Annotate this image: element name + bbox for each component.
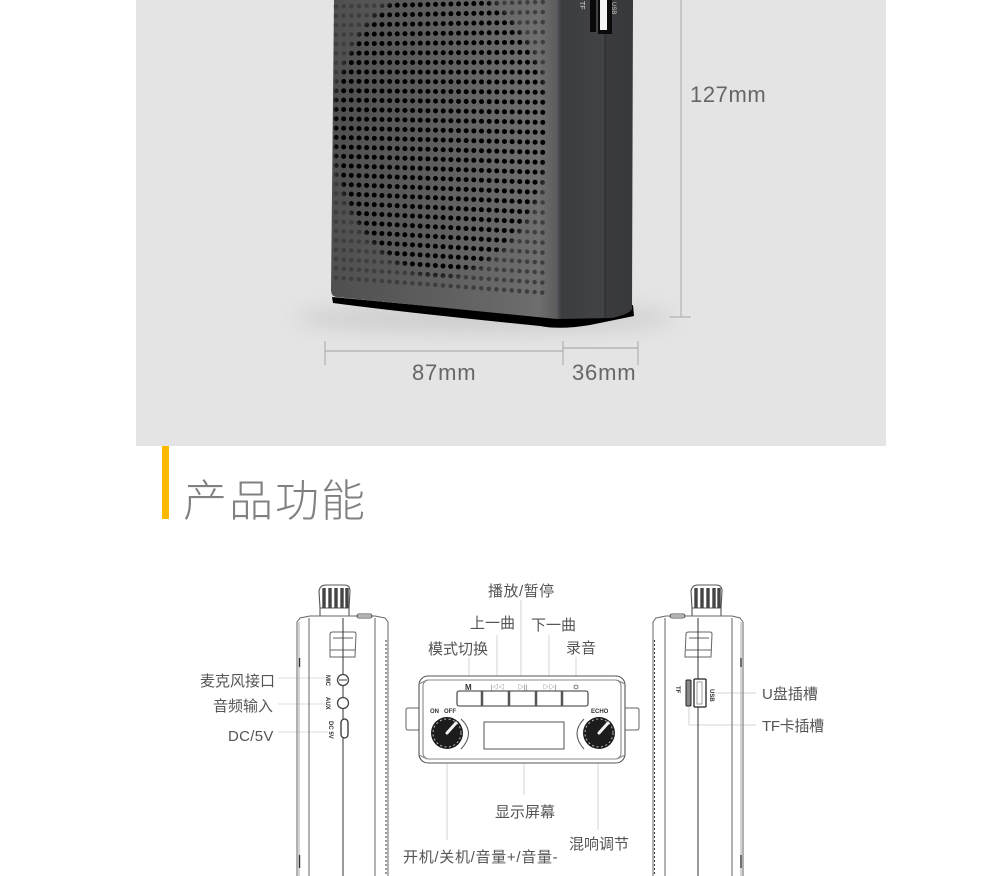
label: previous: 上一曲 <box>470 615 515 632</box>
label: display: 显示屏幕 <box>495 804 555 821</box>
screen <box>484 722 564 749</box>
DC port <box>327 719 348 739</box>
dimension: depth 36mm <box>563 341 638 385</box>
label: mode: 模式切换 <box>428 641 488 658</box>
leader lines left <box>278 678 328 732</box>
DC port: DC 5V <box>327 721 333 739</box>
left knob: OFF <box>444 709 456 715</box>
label: next: 下一曲 <box>531 617 576 634</box>
leader lines <box>447 600 598 840</box>
left knob <box>430 709 468 749</box>
label: mic: 麦克风接口 <box>200 673 275 690</box>
USB slot: USB <box>708 689 714 702</box>
left knob: ON <box>430 709 439 715</box>
label: TF slot: TF卡插槽 <box>762 718 824 735</box>
MIC port <box>324 674 348 687</box>
diagram: top view <box>403 583 639 866</box>
TF slot <box>674 680 691 706</box>
diagram: left side view <box>200 585 388 876</box>
panel: product dimensions <box>136 0 886 446</box>
side tabs <box>406 708 639 730</box>
diagram: right side view <box>653 585 824 876</box>
top knob <box>670 585 722 618</box>
AUX port <box>324 697 348 710</box>
right knob <box>577 709 615 749</box>
AUX port: AUX <box>324 697 330 710</box>
button row <box>457 683 588 706</box>
button row: |◁◁ <box>491 684 505 691</box>
dimension: width 87mm: 87mm <box>412 360 476 385</box>
ports on speaker side: USB <box>610 2 616 14</box>
label: audio in: 音频输入 <box>213 698 273 715</box>
label: power volume: 开机/关机/音量+/音量- <box>403 849 558 866</box>
dimension: height 127mm: 127mm <box>690 82 766 107</box>
top knob <box>319 585 372 618</box>
body outline <box>297 616 388 876</box>
right knob: ECHO <box>591 709 609 715</box>
button row: ▷▷| <box>543 684 557 691</box>
panel outline <box>419 676 625 763</box>
section accent bar <box>162 446 169 519</box>
MIC port: MIC <box>324 675 330 687</box>
label: echo: 混响调节 <box>569 836 629 853</box>
button row: M <box>465 683 472 692</box>
USB slot <box>694 679 714 707</box>
label: dc: DC/5V <box>228 728 274 745</box>
dimension: depth 36mm: 36mm <box>572 360 636 385</box>
speaker photo <box>331 0 634 328</box>
label: record: 录音 <box>566 640 596 657</box>
ports on speaker side: TF <box>578 1 585 10</box>
body outline <box>653 616 743 876</box>
ports on speaker side <box>578 0 616 34</box>
TF slot: TF <box>674 686 680 694</box>
button row: ▷|| <box>518 684 528 691</box>
label: play pause: 播放/暂停 <box>488 583 555 600</box>
heading: 产品功能 <box>183 477 367 526</box>
label: USB slot: U盘插槽 <box>762 685 818 703</box>
speaker floor shadow <box>295 304 675 332</box>
leader lines right <box>689 693 756 725</box>
